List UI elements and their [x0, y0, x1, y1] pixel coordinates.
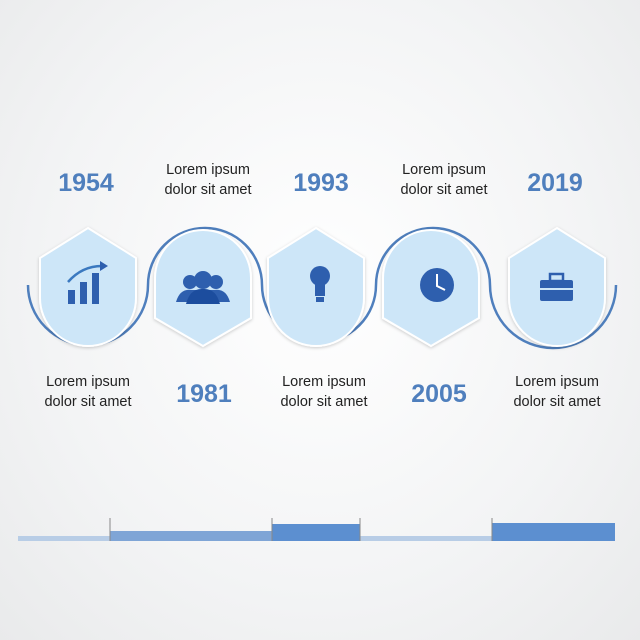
- text top 2: Lorem ipsum: [166, 162, 250, 178]
- text bottom 3: dolor sit amet: [280, 394, 368, 410]
- text top 4: dolor sit amet: [400, 182, 488, 198]
- year 2005: 2005: [411, 380, 467, 408]
- icon: briefcase: [540, 274, 573, 301]
- text bottom 1: Lorem ipsum: [46, 374, 130, 390]
- text bottom 5: dolor sit amet: [513, 394, 601, 410]
- shield 2: [155, 230, 251, 346]
- year 1954: 1954: [58, 169, 114, 197]
- shield 5: [509, 228, 605, 346]
- shield 3: [268, 228, 364, 346]
- icon: people: [176, 271, 230, 304]
- year 1981: 1981: [176, 380, 232, 408]
- icon: bulb: [310, 266, 330, 302]
- text bottom 1: dolor sit amet: [44, 394, 132, 410]
- text bottom 5: Lorem ipsum: [515, 374, 599, 390]
- text bottom 1: [44, 374, 132, 410]
- bottom bar chart: [18, 518, 615, 541]
- text bottom 3: [280, 374, 368, 410]
- icon: chart: [68, 261, 108, 304]
- text top 4: Lorem ipsum: [402, 162, 486, 178]
- wave line: [28, 228, 616, 348]
- shield 4: [383, 230, 479, 346]
- text top 2: dolor sit amet: [164, 182, 252, 198]
- year 1993: 1993: [293, 169, 349, 197]
- text bottom 3: Lorem ipsum: [282, 374, 366, 390]
- text top 4: [400, 162, 488, 198]
- icon: clock: [420, 268, 454, 302]
- text top 2: [164, 162, 252, 198]
- year 2019: 2019: [527, 169, 583, 197]
- shield 1: [40, 228, 136, 346]
- text bottom 5: [513, 374, 601, 410]
